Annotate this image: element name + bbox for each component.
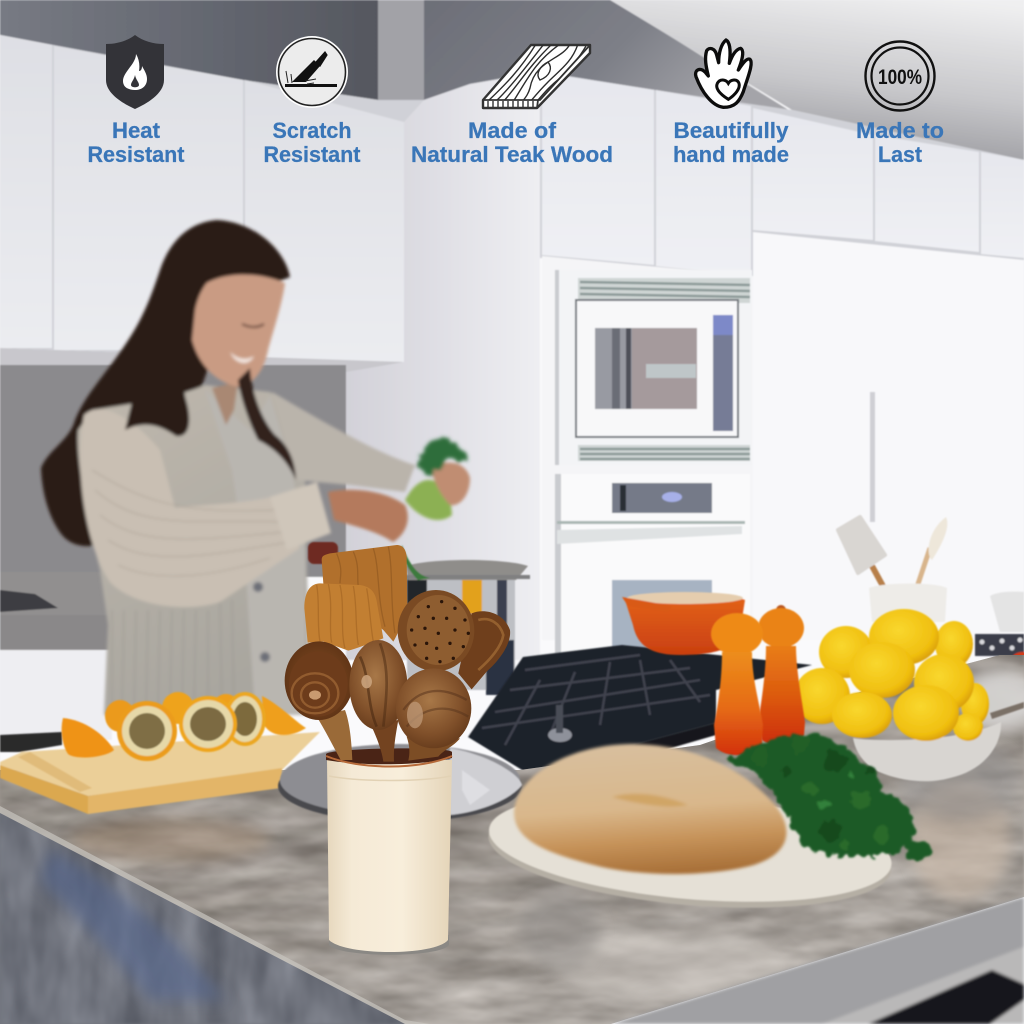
tomato (1009, 652, 1024, 678)
hair strand right (238, 368, 296, 480)
label: Made of (468, 118, 557, 143)
label: hand made (673, 142, 789, 167)
passion fruit 1 (117, 701, 177, 761)
column (378, 0, 424, 102)
stove (468, 645, 812, 786)
eye (242, 324, 264, 327)
icon: wood plank (483, 44, 590, 108)
upper left cabinets (0, 35, 404, 362)
silver tray (278, 744, 522, 822)
smile (230, 352, 254, 363)
central wall tower (346, 72, 540, 660)
near arm (80, 409, 300, 607)
microwave window (595, 328, 697, 409)
button (253, 582, 263, 592)
island right face (611, 897, 1024, 1024)
left ladle (285, 641, 353, 760)
label: Heat (112, 118, 161, 143)
button (260, 652, 270, 662)
greens leaves (417, 438, 468, 475)
far hand (431, 463, 470, 505)
label: Resistant (264, 142, 361, 167)
greens stems (405, 480, 452, 520)
passion fruit 2 (179, 696, 237, 752)
wall: upper right grey (424, 0, 792, 112)
neck (212, 382, 238, 425)
lower right white panels (753, 232, 1024, 640)
crock front rim (326, 756, 452, 766)
front lemons (832, 685, 983, 741)
island left face (0, 810, 420, 1024)
crock inside (326, 748, 452, 764)
cabinet underside strip (0, 348, 404, 375)
left mill (711, 613, 763, 755)
front spoon (396, 668, 471, 761)
cuff (270, 482, 331, 550)
hair front (125, 230, 290, 436)
back counter (0, 572, 112, 616)
bread loaf (514, 744, 786, 874)
right mill (758, 605, 805, 745)
crock groove (329, 776, 451, 780)
wall: upper left grey (0, 0, 378, 100)
parsley (726, 735, 930, 863)
orange wedge (62, 718, 114, 757)
label: Natural Teak Wood (411, 142, 613, 167)
plate (484, 778, 896, 922)
hair back (41, 220, 290, 546)
feature: scratch resistant (264, 36, 361, 167)
label: Scratch (272, 118, 352, 143)
oven handle (868, 970, 1024, 1024)
spoons and spatulas (285, 545, 510, 762)
oven (555, 474, 750, 654)
far right white bowl (990, 592, 1024, 632)
microwave keypad (713, 315, 733, 431)
citrus fruit slices (62, 692, 306, 761)
lemons (794, 609, 989, 725)
feature: beautifully hand made (673, 40, 789, 167)
wedge right (262, 696, 306, 735)
crock shadow base (329, 935, 449, 955)
checkered cloth (975, 634, 1024, 656)
icon: knife scratching surface (276, 36, 348, 108)
utensil cup, back right (838, 517, 1024, 678)
torso lower ribbing (112, 600, 234, 712)
pot (308, 542, 530, 695)
icon: 100 percent seal: 100% (878, 66, 922, 89)
feature: made to last (856, 42, 944, 167)
face (192, 275, 285, 387)
far arm (272, 392, 415, 492)
right back spoon (458, 611, 510, 689)
label: Beautifully (674, 118, 789, 143)
backsplash (0, 365, 346, 577)
red pot (622, 592, 745, 655)
crock body (327, 760, 452, 952)
ceiling (610, 0, 1024, 160)
pepper mills (711, 605, 805, 755)
lower left cabinet (0, 650, 112, 740)
woman (41, 220, 470, 715)
icon: hand with heart (696, 40, 751, 107)
label: Last (878, 142, 923, 167)
knife on counter (990, 702, 1024, 719)
upper right cabinets (542, 72, 1024, 276)
label: Resistant (88, 142, 185, 167)
label: Made to (856, 118, 944, 143)
bowl (853, 722, 1001, 781)
cutting board (0, 732, 320, 814)
slotted spoon (398, 590, 474, 671)
passion fruit 3 (224, 692, 266, 746)
utensil crock with teak spoons (285, 545, 510, 955)
front spatula (304, 583, 383, 651)
cardigan front panel (205, 390, 306, 715)
icon: shield with flame (106, 35, 164, 109)
cabinet gap shading (0, 35, 1024, 362)
feature: heat resistant (88, 35, 185, 167)
near hand (328, 490, 408, 542)
fruit bowl with lemons (794, 609, 1001, 781)
back spatula (322, 545, 407, 642)
marble countertop (0, 650, 1024, 1024)
torso (78, 385, 310, 715)
microwave (555, 270, 752, 465)
feature: natural teak wood (411, 44, 613, 167)
middle spoon (349, 640, 407, 762)
